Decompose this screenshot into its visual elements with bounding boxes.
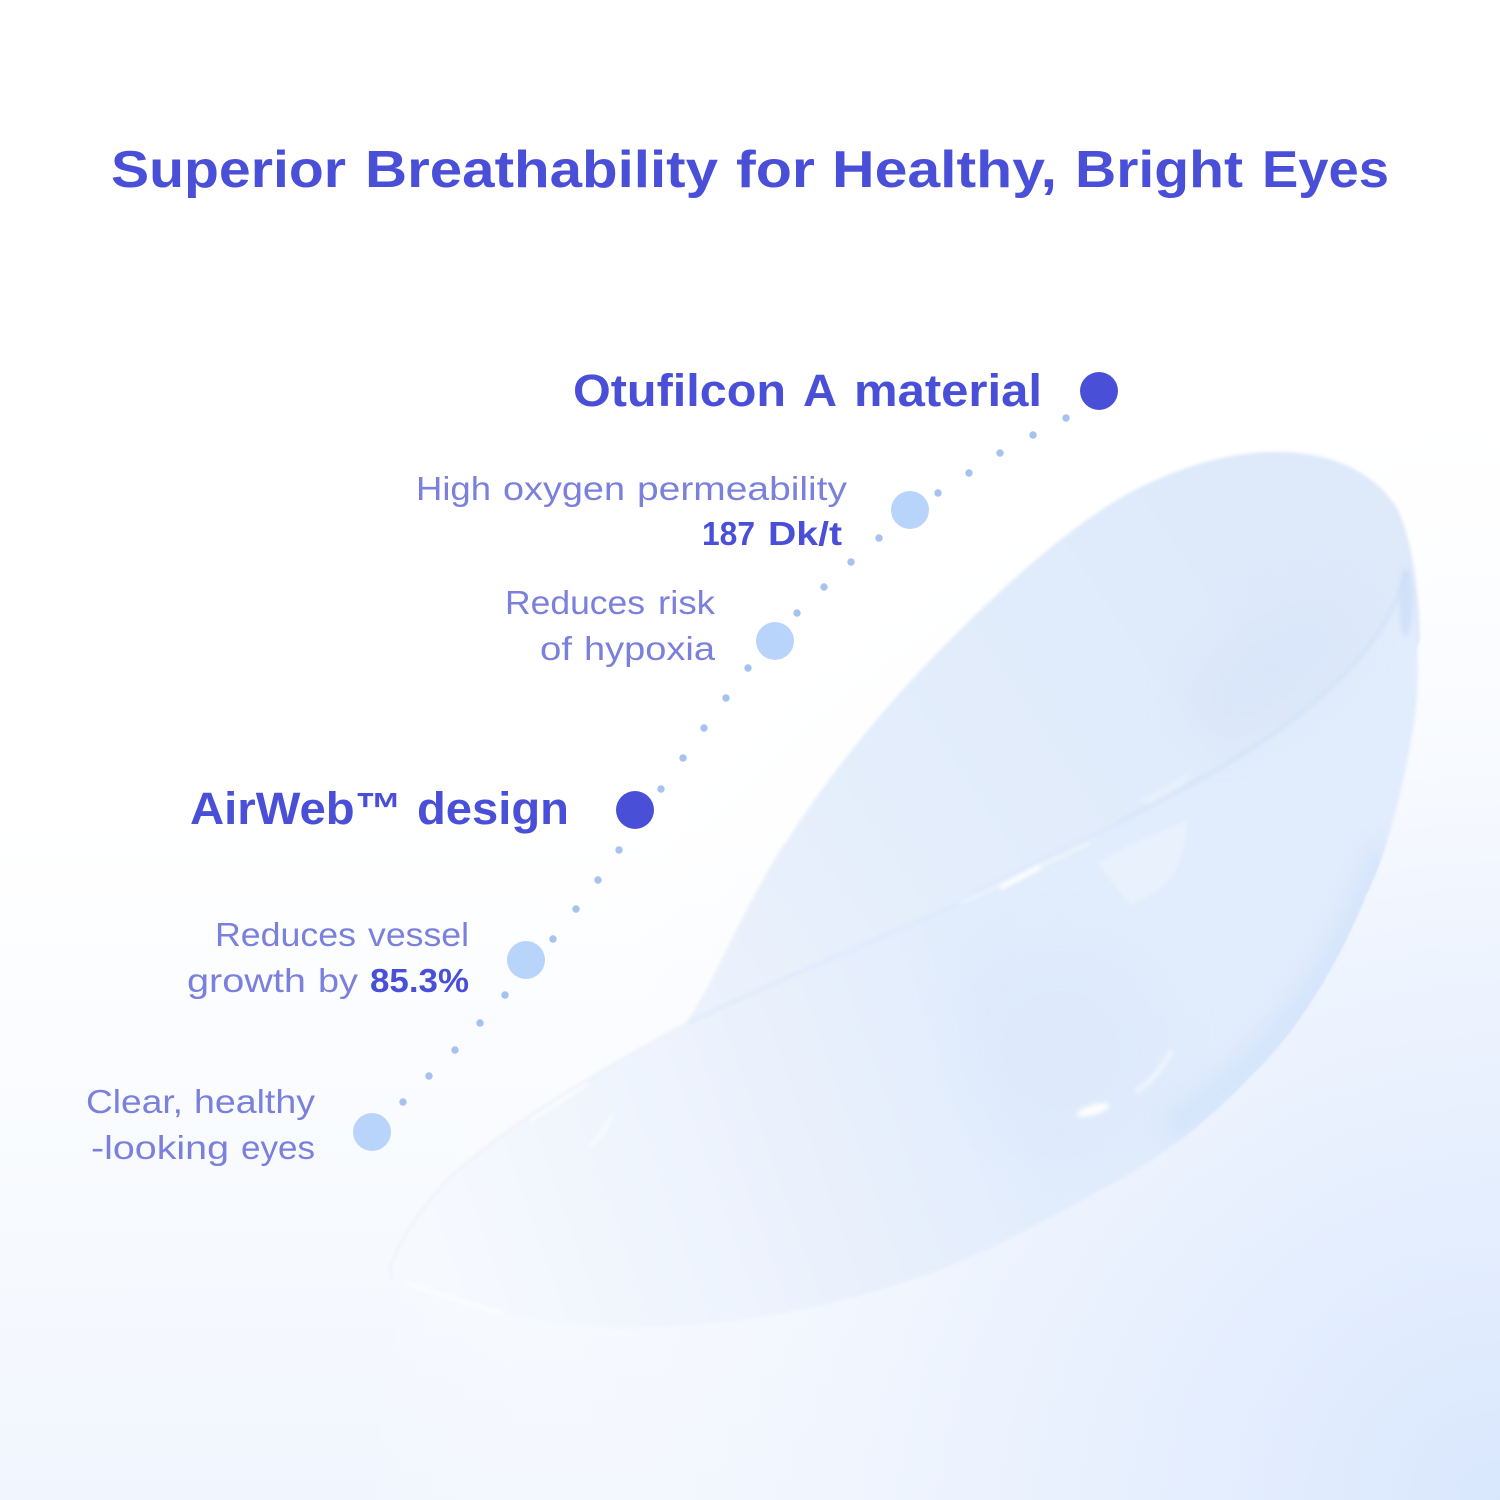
heading: Otufilcon A material [573, 365, 1042, 416]
text: high oxygen permeability [416, 470, 848, 552]
text: clear healthy-looking eyes: eyes [241, 1129, 315, 1166]
title: Healthy, [832, 141, 1057, 199]
text: clear healthy-looking eyes [86, 1083, 316, 1166]
marker: clear healthy-looking eyes [353, 1113, 391, 1151]
text: high oxygen permeability: Dk/t [768, 515, 842, 552]
text: high oxygen permeability: permeability [637, 470, 848, 507]
heading: AirWeb design: AirWeb™ [190, 783, 402, 834]
title: Superior [111, 141, 346, 199]
marker: reduces risk of hypoxia [756, 622, 794, 660]
text: reduces risk of hypoxia: of [540, 630, 573, 667]
text: reduces risk of hypoxia [505, 584, 716, 667]
heading: Otufilcon A material: A [803, 365, 837, 416]
dotted connector line [399, 414, 1070, 1106]
text: reduces vessel growth [187, 916, 469, 999]
title: for [736, 141, 815, 199]
title: Eyes [1262, 141, 1389, 199]
text: reduces risk of hypoxia: hypoxia [584, 630, 716, 667]
heading: Otufilcon A material: Otufilcon [573, 365, 786, 416]
marker: Otufilcon A material [1080, 372, 1118, 410]
text: reduces vessel growth: vessel [368, 916, 469, 953]
marker: AirWeb design [616, 791, 654, 829]
heading: Otufilcon A material: material [854, 365, 1042, 416]
contact lens illustration [486, 451, 1421, 1304]
marker: reduces vessel growth [507, 941, 545, 979]
text: high oxygen permeability: High [416, 470, 491, 507]
text: reduces vessel growth: by [318, 962, 359, 999]
text: high oxygen permeability: 187 [702, 515, 755, 552]
title [111, 141, 1389, 199]
text: clear healthy-looking eyes: -looking [91, 1129, 229, 1166]
text: reduces vessel growth: Reduces [215, 916, 356, 953]
title: Breathability [365, 141, 718, 199]
marker: high oxygen permeability [891, 491, 929, 529]
text: high oxygen permeability: oxygen [503, 470, 625, 507]
title: Bright [1075, 141, 1243, 199]
text: clear healthy-looking eyes: healthy [194, 1083, 316, 1120]
heading: AirWeb design: design [417, 783, 569, 834]
text: reduces vessel growth: 85.3% [370, 962, 469, 999]
text: reduces risk of hypoxia: risk [658, 584, 716, 621]
text: reduces vessel growth: growth [187, 962, 306, 999]
heading: AirWeb design [190, 783, 569, 834]
text: reduces risk of hypoxia: Reduces [505, 584, 645, 621]
text: clear healthy-looking eyes: Clear, [86, 1083, 183, 1120]
